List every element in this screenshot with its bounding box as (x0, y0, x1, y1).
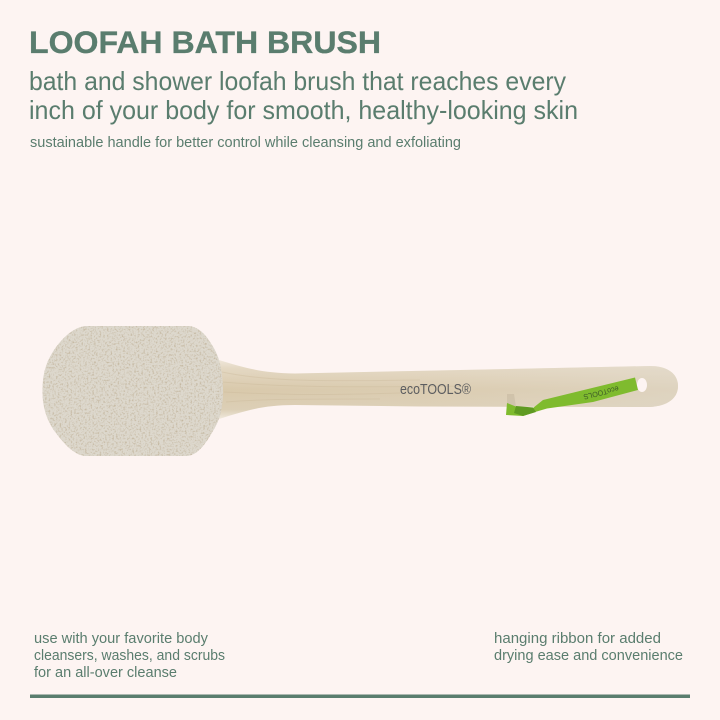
subtitle (29, 66, 578, 125)
callout: use with body cleansers: for an all-over cleanse (34, 664, 177, 681)
product: loofah bath brush (42, 326, 678, 456)
callout: use with body cleansers: cleansers, washes, and scrubs (34, 647, 225, 664)
loofah pad (42, 326, 223, 456)
ribbon print: ecoTOOLS (583, 384, 620, 402)
subtitle: bath and shower loofah brush that reaches every (29, 66, 566, 96)
hanging hole (637, 378, 647, 392)
brand mark: ecoTOOLS® (400, 382, 471, 398)
callout: use with body cleansers: use with your favorite body (34, 630, 208, 647)
callout: hanging ribbon (494, 630, 683, 664)
title: LOOFAH BATH BRUSH (29, 24, 381, 60)
tagline: sustainable handle for better control while cleansing and exfoliating (30, 134, 461, 151)
wooden handle (219, 360, 678, 419)
subtitle: inch of your body for smooth, healthy-looking skin (29, 95, 578, 125)
bottom rule (30, 694, 690, 698)
callout: hanging ribbon: hanging ribbon for added (494, 630, 661, 647)
callout: use with body cleansers (34, 630, 225, 681)
hanging ribbon (506, 378, 638, 416)
callout: hanging ribbon: drying ease and convenience (494, 647, 683, 664)
